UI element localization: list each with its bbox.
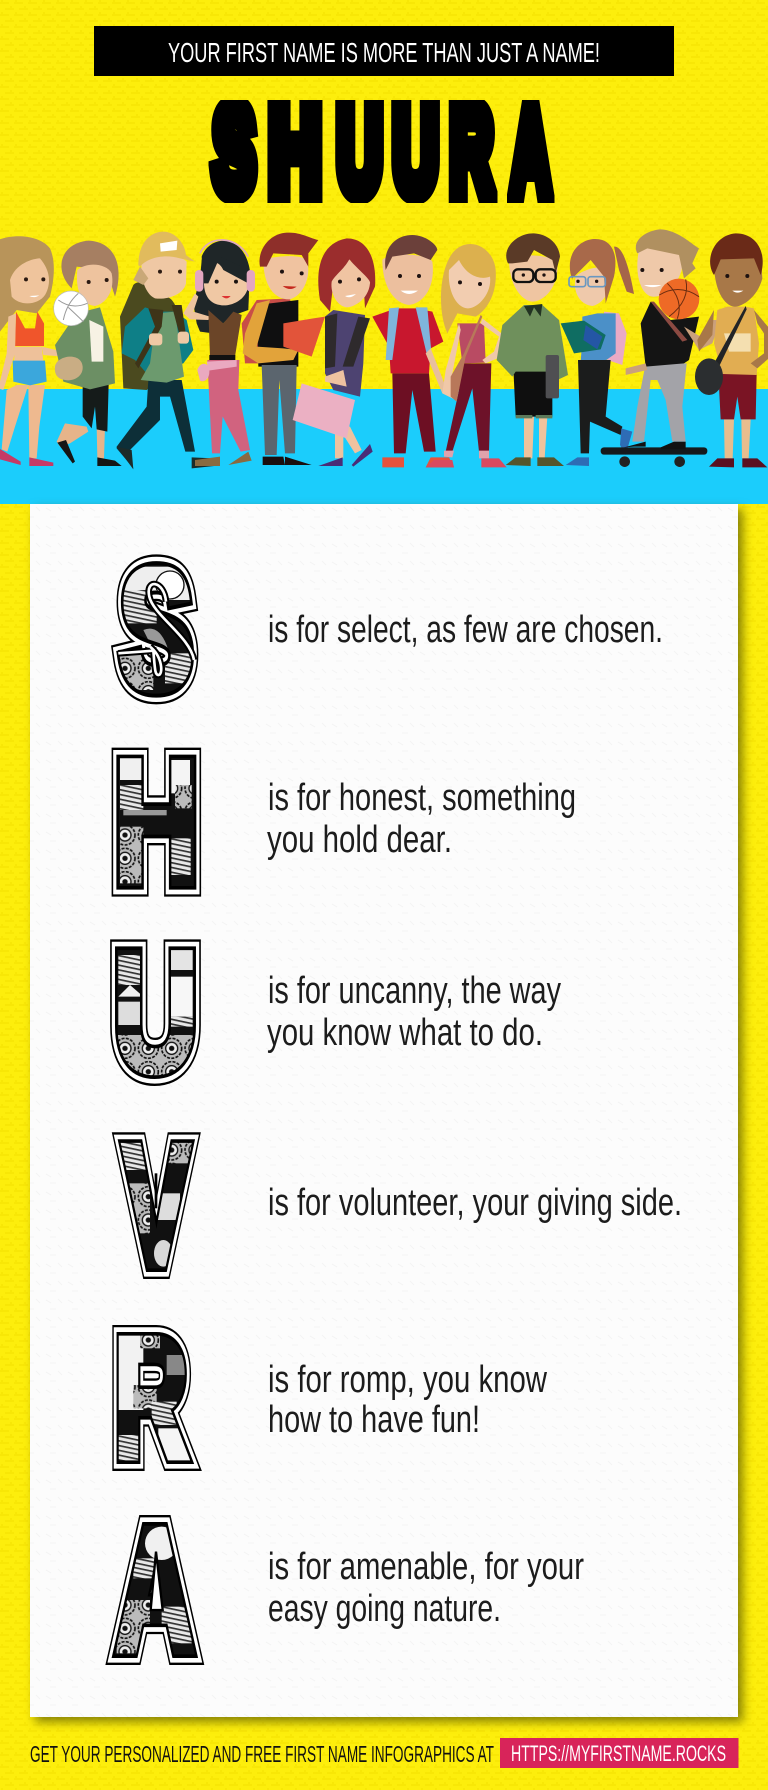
name title: R	[450, 82, 493, 220]
name title	[208, 100, 554, 203]
text: R lines: is for romp, you know	[268, 1359, 547, 1401]
row V	[90, 1110, 682, 1301]
letter R mandala	[112, 1325, 202, 1471]
letter R mandala: R	[114, 1302, 188, 1493]
person: skater with basketball	[601, 229, 721, 467]
letter S mandala	[111, 554, 198, 704]
name title: U	[336, 82, 382, 220]
row R: how to have fun!	[268, 1399, 480, 1441]
letter S mandala: S	[119, 535, 193, 725]
heading banner	[94, 26, 674, 76]
letter H mandala: H	[114, 724, 199, 919]
illustration: group of young people	[0, 229, 768, 469]
letter A mandala: A	[116, 1492, 194, 1688]
letter H mandala: H	[114, 724, 199, 919]
letter V mandala	[112, 1132, 201, 1279]
name title: A	[511, 82, 550, 220]
people right half	[372, 229, 768, 467]
person: boy in yellow tank top	[695, 233, 768, 467]
row A	[105, 1515, 584, 1665]
letter A mandala: A	[116, 1492, 194, 1688]
row U	[90, 918, 561, 1106]
person: girl in orange top	[0, 236, 80, 466]
letter V mandala: V	[123, 1110, 189, 1301]
row H	[90, 724, 576, 919]
row A: easy going nature.	[268, 1588, 501, 1630]
letter R mandala: R	[114, 1302, 188, 1493]
letter S mandala: S	[119, 535, 193, 725]
text: U lines: is for uncanny, the way	[268, 970, 561, 1012]
letter V mandala: V	[123, 1110, 189, 1301]
people left half	[0, 232, 375, 469]
person: boy with glasses	[497, 233, 568, 466]
letter U mandala: U	[113, 918, 198, 1106]
letter S mandala: S	[119, 535, 193, 725]
letter H mandala: H	[114, 724, 199, 919]
letter R mandala: R	[114, 1302, 188, 1493]
letter A mandala: A	[116, 1492, 194, 1688]
name title: U	[392, 82, 438, 220]
person: girl with pink headphones	[183, 240, 255, 466]
text: A lines: is for amenable, for your	[268, 1546, 584, 1588]
person: boy reading a red book	[242, 233, 325, 465]
name title: H	[268, 82, 320, 220]
row R	[90, 1302, 547, 1493]
letter U mandala: U	[113, 918, 198, 1106]
letter U mandala: U	[113, 918, 198, 1106]
person: girl with volleyball	[54, 241, 122, 466]
person: boy in red shirt	[372, 235, 454, 467]
letter V mandala: V	[123, 1110, 189, 1301]
row S	[90, 535, 663, 725]
person: hiker with cap and backpack	[117, 232, 220, 469]
row H: you hold dear.	[267, 819, 452, 861]
person: girl with pink case	[293, 238, 375, 467]
row U: you know what to do.	[267, 1012, 543, 1054]
name title: S	[213, 82, 255, 220]
person: blonde girl	[426, 244, 507, 467]
person: ponytail girl with tablet	[561, 239, 634, 466]
main white panel	[30, 504, 738, 1717]
blue floor band	[0, 389, 768, 504]
text: H lines: is for honest, something	[268, 777, 576, 819]
letter A mandala	[105, 1515, 204, 1665]
